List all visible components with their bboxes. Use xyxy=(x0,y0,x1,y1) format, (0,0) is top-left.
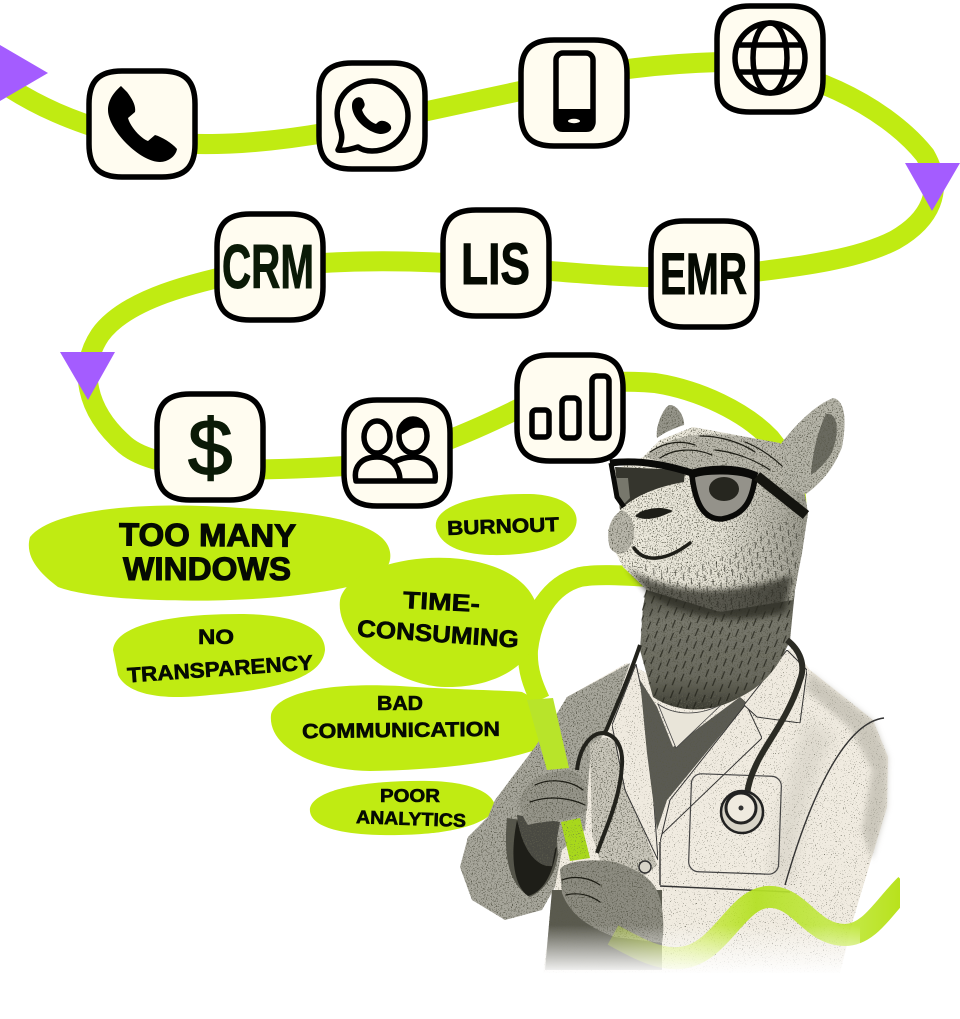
mouth xyxy=(634,543,690,558)
coat button xyxy=(639,861,651,873)
blob: too many windows: TOO MANY xyxy=(119,516,296,554)
coat right collar xyxy=(744,650,807,723)
blob: poor analytics: POOR xyxy=(380,785,440,806)
coat right lapel xyxy=(660,704,762,842)
green strap lower section xyxy=(561,818,590,861)
lower coat shading xyxy=(545,890,662,970)
icon tile: people xyxy=(344,400,450,506)
coat pocket xyxy=(688,773,782,875)
blob: time-consuming: TIME- xyxy=(402,587,481,618)
blob: no transparency: NO xyxy=(198,626,234,649)
coat shading: right sleeve edge xyxy=(806,672,888,860)
left ear xyxy=(657,405,684,438)
blob: no transparency xyxy=(113,614,325,697)
blob: no transparency: TRANSPARENCY xyxy=(127,652,314,687)
icon tile: WhatsApp xyxy=(319,63,425,169)
head xyxy=(608,427,808,612)
green line behind the llama and into its hands xyxy=(528,575,650,700)
undershirt xyxy=(658,704,722,748)
icon tile: globe xyxy=(717,6,823,112)
illustration bottom fade xyxy=(530,925,860,977)
sleeve fold shadow xyxy=(506,818,558,897)
icon tile: LIS: LIS xyxy=(461,232,530,297)
icon tile: bar chart xyxy=(517,355,623,461)
right margin mask xyxy=(900,860,940,950)
blob: bad communication: BAD xyxy=(377,693,423,715)
arrow: left turn triangle xyxy=(60,352,115,400)
blob: bad communication xyxy=(271,685,549,771)
stethoscope xyxy=(577,645,640,853)
route line: green path connecting the icons xyxy=(10,62,934,560)
llama doctor illustration xyxy=(460,398,940,977)
icon tile: phone xyxy=(89,71,195,177)
icon tile: EMR: EMR xyxy=(660,242,747,307)
nostril xyxy=(635,508,673,519)
blob: too many windows: WINDOWS xyxy=(123,551,291,587)
coat shading: mid fold xyxy=(770,720,835,885)
wrist xyxy=(517,815,560,866)
blob: poor analytics: ANALYTICS xyxy=(356,806,466,831)
stethoscope chest piece xyxy=(721,791,763,833)
wave ribbon across coat xyxy=(613,885,906,958)
icon tile: CRM xyxy=(217,214,323,320)
blob: burnout: BURNOUT xyxy=(447,514,559,540)
blob: poor analytics xyxy=(310,781,495,835)
forehead fur xyxy=(645,434,805,495)
coat panel between arm and lapel xyxy=(590,738,657,880)
right ear xyxy=(780,398,845,494)
nose xyxy=(608,510,634,554)
glasses xyxy=(610,462,806,519)
icon tile: dollar: $ xyxy=(188,403,232,492)
icon tile: EMR xyxy=(651,221,757,327)
left sleeve xyxy=(460,663,630,920)
lower hand xyxy=(560,860,663,943)
icon tile: dollar xyxy=(157,394,263,500)
sleeve cuff xyxy=(513,820,557,896)
blob: too many windows xyxy=(29,506,390,601)
blob: burnout xyxy=(436,494,577,555)
scrub neckline xyxy=(640,680,747,830)
icon tile: CRM: CRM xyxy=(222,233,314,302)
lab coat body xyxy=(535,647,888,973)
arrow: right turn triangle xyxy=(905,163,960,211)
green strap upper section xyxy=(527,698,569,770)
icon tile: LIS xyxy=(443,210,549,316)
neck xyxy=(640,513,808,709)
head under-jaw shadow xyxy=(627,568,792,619)
blob: time-consuming: CONSUMING xyxy=(356,615,520,654)
coat seam lines xyxy=(660,718,884,892)
icon tile: mobile phone xyxy=(521,40,627,146)
arrow: start triangle xyxy=(0,45,48,101)
blob: time-consuming xyxy=(340,558,539,687)
upper hand xyxy=(520,770,588,825)
left lapel xyxy=(612,664,658,860)
blob: bad communication: COMMUNICATION xyxy=(302,718,500,743)
